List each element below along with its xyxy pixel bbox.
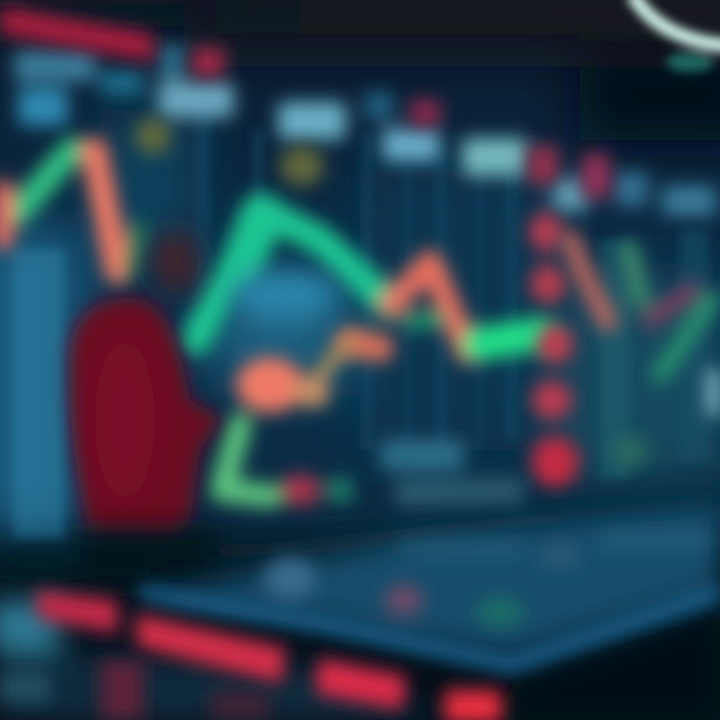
panel: upper data tiles [14,44,716,216]
dark ceiling band [0,0,720,140]
panel: right red candles column [529,212,579,488]
line chart: lower green and hand highlight [222,340,354,506]
top-left red banner [0,6,610,198]
lower red tickers [36,590,502,720]
chart glow: blue under central peak [230,269,340,321]
desk texture patches [140,530,720,665]
chart wall glow [0,110,720,530]
figure: trader in red [70,230,222,540]
line chart: left green and red peak [3,150,138,272]
line chart: central green peak and red zigzag [196,210,540,352]
panel: vertical grid columns [14,100,708,540]
dark band below charts [0,490,720,586]
icon: curved white light top right [632,0,720,72]
line chart: right zigzag [570,240,714,468]
panel: central readout [380,440,525,508]
small amber markers [135,118,324,186]
lower dim red bars [0,660,270,720]
panel: trading desk [0,505,720,720]
